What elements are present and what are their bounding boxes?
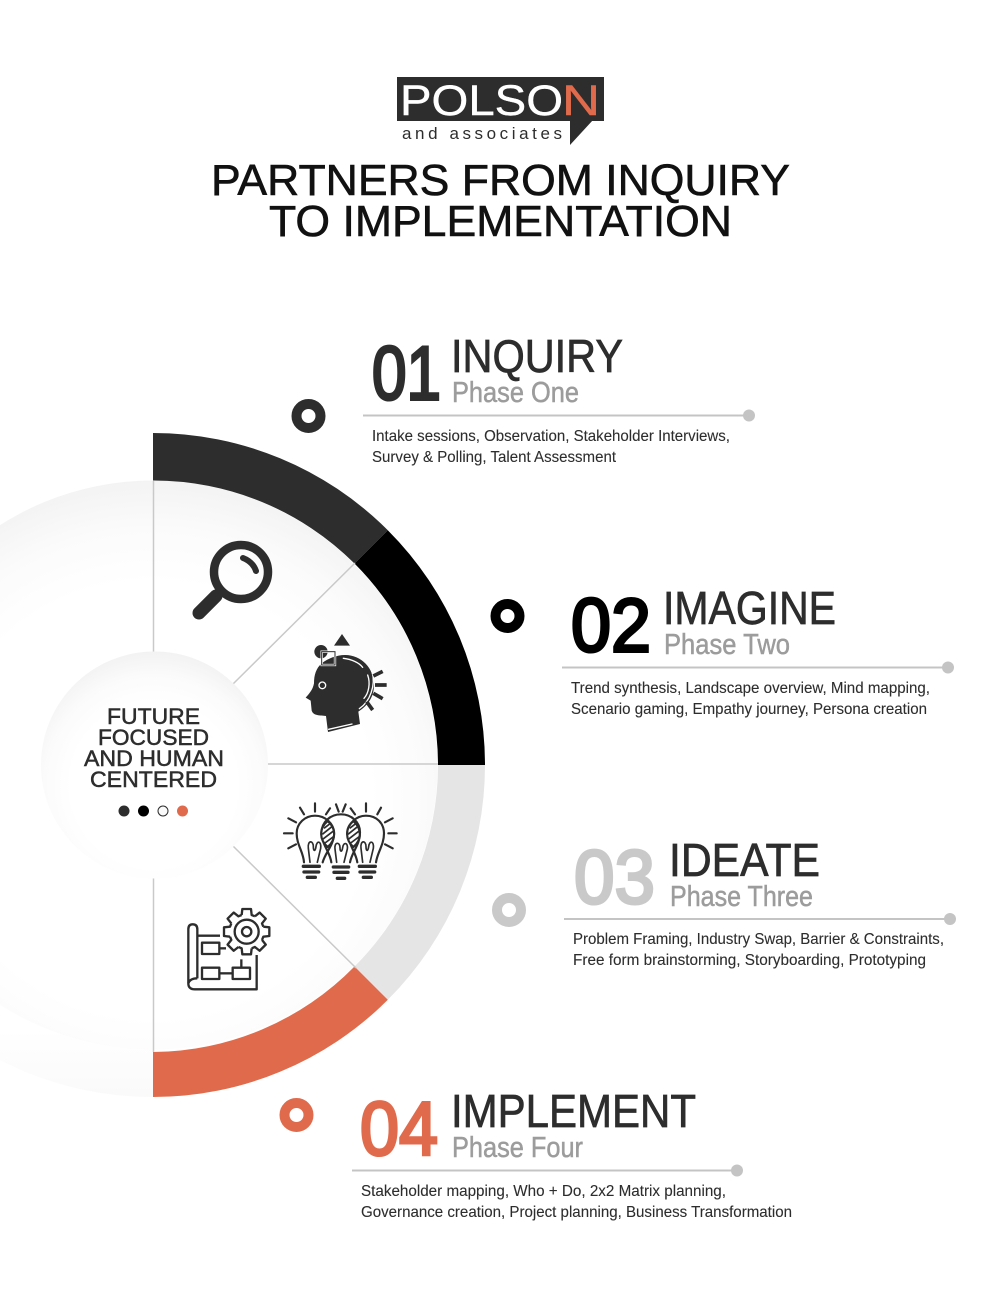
rule: [564, 913, 956, 925]
arc: implement: [153, 966, 388, 1097]
phase 01 marker: [296, 404, 320, 428]
phase 04 block: [352, 1085, 792, 1221]
hub dots: [118, 806, 188, 816]
subtitle: Phase Three: [670, 881, 813, 913]
description: Problem Framing, Industry Swap, Barrier & Constraints,: [573, 931, 944, 948]
rule: [562, 662, 954, 674]
hub text: FUTURE: [107, 704, 200, 729]
phase 03 block: [564, 834, 956, 969]
rule: [363, 410, 755, 422]
hub text: [84, 704, 224, 792]
description: [571, 680, 930, 718]
description: Intake sessions, Observation, Stakeholder Interviews,: [372, 428, 730, 445]
logo: [397, 77, 604, 145]
arc: imagine: [354, 530, 485, 765]
heading: INQUIRY: [451, 330, 623, 382]
phase 01 block: [363, 330, 755, 466]
logo: POLSO: [400, 77, 563, 125]
description: Stakeholder mapping, Who + Do, 2x2 Matrix planning,: [361, 1183, 726, 1200]
hub text: FOCUSED: [98, 725, 209, 750]
spokes: [154, 481, 438, 1052]
title: TO IMPLEMENTATION: [269, 197, 732, 246]
phase 03 marker: [497, 898, 521, 922]
description: Survey & Polling, Talent Assessment: [372, 449, 617, 466]
number: 04: [360, 1087, 438, 1172]
phase 02 marker: [496, 604, 520, 628]
description: Scenario gaming, Empathy journey, Persona creation: [571, 701, 927, 718]
heading: IMAGINE: [663, 582, 836, 634]
description: Governance creation, Project planning, Business Transformation: [361, 1204, 792, 1221]
title: PARTNERS FROM INQUIRY: [211, 156, 790, 205]
logo: and associates: [402, 124, 562, 143]
description: [361, 1183, 792, 1221]
heading: IMPLEMENT: [451, 1085, 696, 1137]
hub text: CENTERED: [90, 767, 217, 792]
icon: blueprint with gear: [188, 909, 269, 989]
inner disc: [0, 480, 438, 1050]
title: [211, 156, 790, 246]
phase 04 marker: [284, 1103, 308, 1127]
faint lower shadow: [0, 1030, 153, 1097]
number: 03: [574, 836, 655, 920]
hub text: AND HUMAN: [84, 746, 224, 771]
subtitle: Phase Two: [664, 629, 790, 661]
description: Free form brainstorming, Storyboarding, Prototyping: [573, 952, 926, 969]
icon: three light bulbs: [284, 803, 397, 878]
central hub: [41, 652, 268, 878]
subtitle: Phase Four: [452, 1132, 583, 1164]
quarter-ring wheel: [0, 433, 485, 1097]
description: [372, 428, 730, 466]
icon: magnifying glass: [199, 545, 268, 613]
description: Trend synthesis, Landscape overview, Mind mapping,: [571, 680, 930, 697]
number: 01: [372, 332, 441, 416]
logo: N: [562, 77, 600, 125]
arc: inquiry: [153, 433, 388, 564]
subtitle: Phase One: [452, 377, 579, 409]
arc: ideate: [354, 765, 485, 1000]
icon: head with shapes: [306, 634, 387, 732]
phase 02 block: [562, 582, 954, 718]
heading: IDEATE: [669, 834, 820, 886]
number: 02: [571, 584, 651, 668]
description: [573, 931, 944, 969]
rule: [352, 1164, 743, 1176]
